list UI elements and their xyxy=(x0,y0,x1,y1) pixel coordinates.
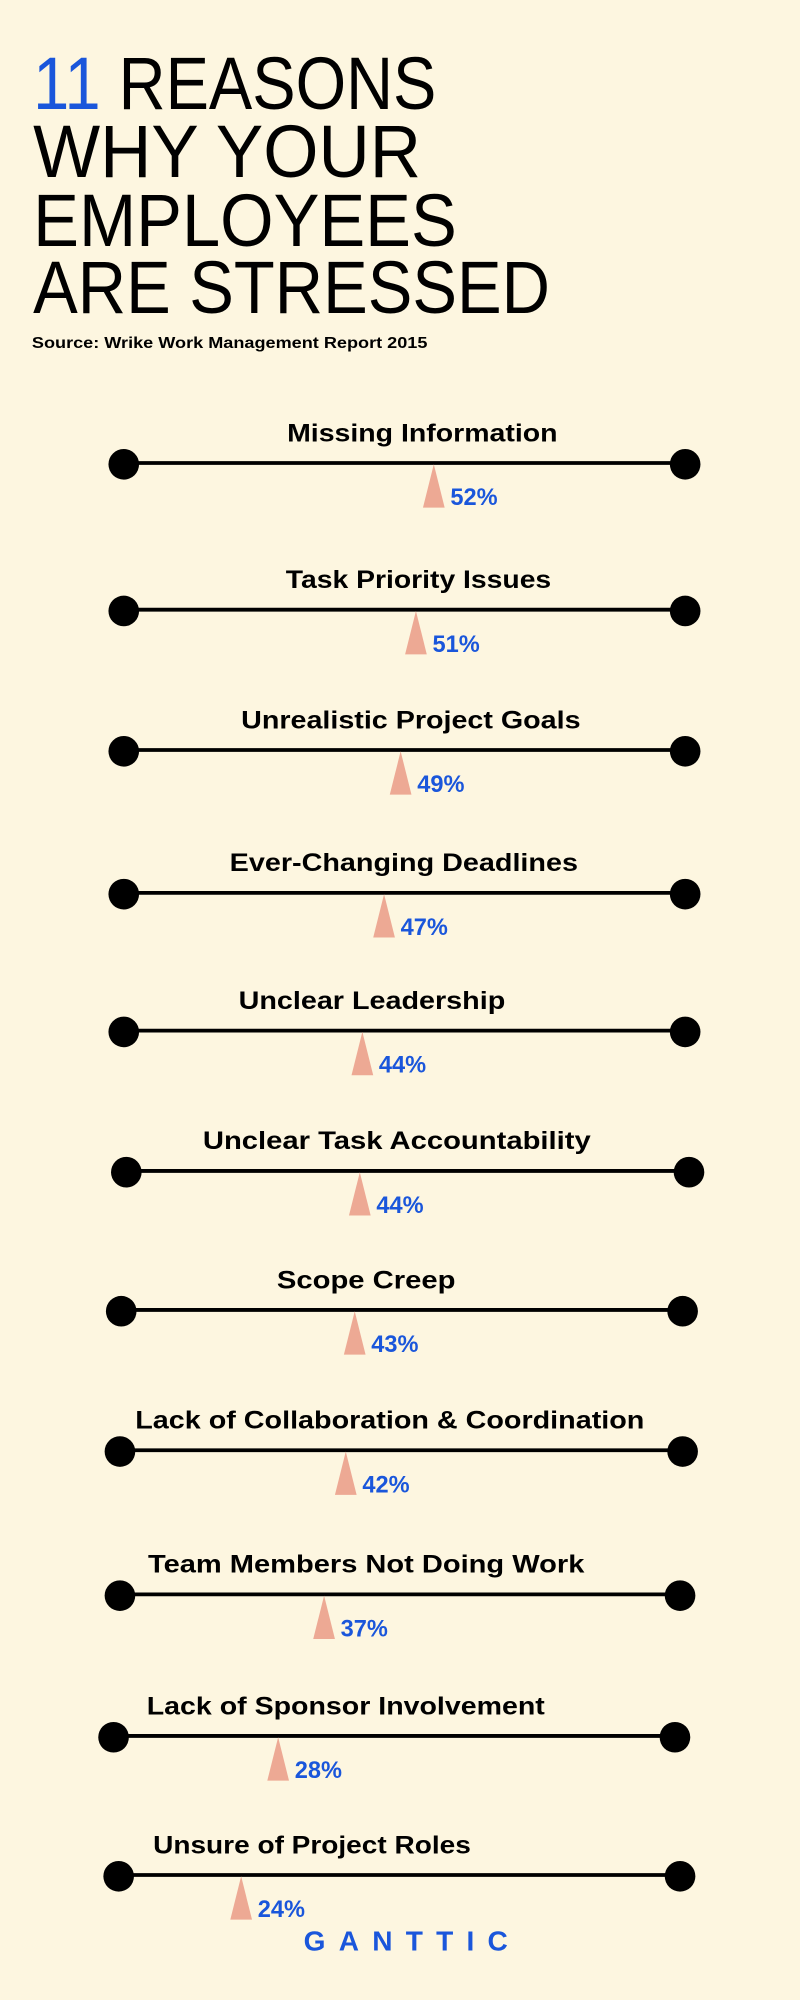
row: Task Priority Issues: 51% xyxy=(433,632,480,658)
title: 11 REASONS xyxy=(33,42,436,125)
row: Team Members Not Doing Work xyxy=(105,1551,695,1642)
row: Unrealistic Project Goals: 49% xyxy=(417,772,464,798)
row: Team Members Not Doing Work: 37% xyxy=(341,1616,388,1642)
row: Missing Information: 52% xyxy=(450,485,498,511)
row: Unsure of Project Roles: 24% xyxy=(258,1897,305,1923)
row: Unsure of Project Roles xyxy=(103,1831,695,1923)
row: Missing Information xyxy=(108,419,700,511)
title: EMPLOYEES xyxy=(33,179,457,262)
row: Team Members Not Doing Work: Team Members Not Doing Work xyxy=(148,1551,585,1579)
title: WHY YOUR xyxy=(33,110,421,193)
row: Task Priority Issues: Task Priority Issues xyxy=(286,566,551,594)
title xyxy=(33,42,550,329)
row: Unclear Leadership xyxy=(108,987,700,1079)
source text: Source: Wrike Work Management Report 2015 xyxy=(32,335,428,352)
row: Task Priority Issues xyxy=(108,566,700,658)
logo: GANTTIC: GANTTIC xyxy=(304,1925,508,1956)
row: Lack of Collaboration & Coordination xyxy=(105,1407,698,1498)
row: Lack of Sponsor Involvement xyxy=(98,1692,690,1784)
row: Unclear Leadership: 44% xyxy=(379,1053,426,1079)
row: Unrealistic Project Goals: Unrealistic Project Goals xyxy=(241,706,581,734)
row: Ever-Changing Deadlines: 47% xyxy=(401,915,448,941)
row: Lack of Sponsor Involvement: 28% xyxy=(295,1758,342,1784)
row: Unclear Task Accountability xyxy=(111,1127,704,1219)
row: Scope Creep: Scope Creep xyxy=(277,1266,456,1294)
row: Lack of Sponsor Involvement: Lack of Sponsor Involvement xyxy=(147,1692,545,1720)
row: Unclear Task Accountability: Unclear Task Accountability xyxy=(203,1127,591,1155)
row: Scope Creep: 43% xyxy=(371,1332,419,1358)
row: Ever-Changing Deadlines: Ever-Changing Deadlines xyxy=(230,849,578,877)
row: Unrealistic Project Goals xyxy=(108,706,700,798)
row: Unsure of Project Roles: Unsure of Project Roles xyxy=(153,1831,471,1859)
row: Ever-Changing Deadlines xyxy=(108,849,700,941)
row: Missing Information: Missing Information xyxy=(287,419,558,447)
row: Lack of Collaboration & Coordination: 42% xyxy=(362,1472,410,1498)
row: Scope Creep xyxy=(106,1266,698,1358)
row: Unclear Task Accountability: 44% xyxy=(376,1193,424,1219)
row: Unclear Leadership: Unclear Leadership xyxy=(239,987,505,1015)
row: Lack of Collaboration & Coordination: Lack of Collaboration & Coordination xyxy=(135,1407,644,1435)
title: ARE STRESSED xyxy=(33,246,550,329)
